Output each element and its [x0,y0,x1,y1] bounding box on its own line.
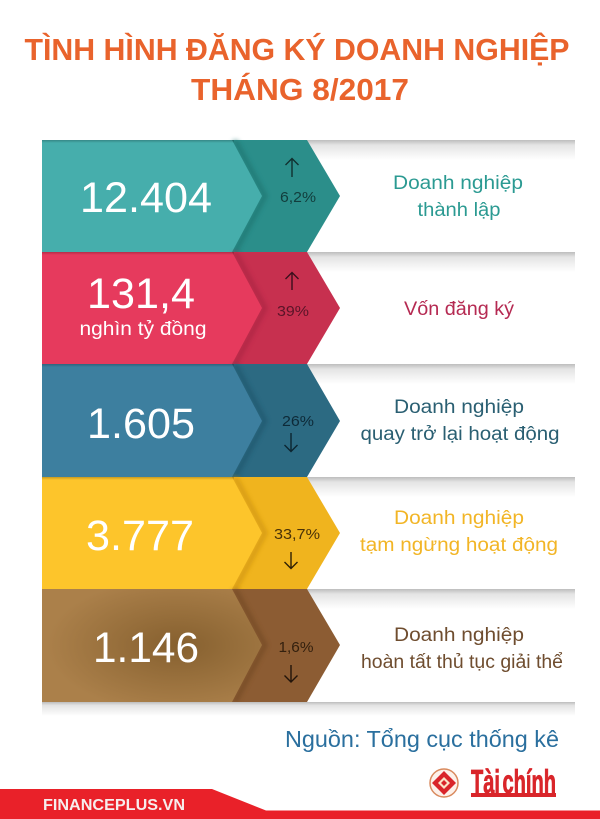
footer text: FINANCEPLUS.VN [43,797,185,814]
value: 3.777: 3.777 [86,512,194,560]
panel: doanh nghiệp hoàn tất thủ tục giải thể: hoàn tất thủ tục giải thể [361,652,563,673]
value: 1.605: 1.605 [87,400,195,448]
value: 131,4 nghìn tỷ đồng [42,252,262,364]
change chevron: 1,6% down: 1,6% [278,639,314,656]
panel: doanh nghiệp quay trở lại hoạt động [42,364,575,477]
icon: arrow down [284,665,298,682]
panel: doanh nghiệp thành lập: thành lập [418,200,500,221]
change chevron: 1,6% down [232,589,340,702]
label: vốn đăng ký: Vốn đăng ký [404,299,515,320]
title [24,31,570,107]
value: 1.146: 1.146 [93,624,199,672]
icon: arrow down [284,433,298,452]
footer bar [0,789,600,819]
label: doanh nghiệp quay trở lại hoạt động: Doanh nghiệp [394,397,524,418]
icon: emblem [430,769,458,797]
change chevron: 33,7% down: 33,7% [274,526,320,543]
source note: Nguồn: Tổng cục thống kê [285,726,559,752]
change chevron: 6,2% up: 6,2% [280,189,316,206]
change chevron: 39% up [232,252,340,364]
bottom shadow [42,702,575,716]
panel: doanh nghiệp tạm ngừng hoạt động: tạm ngừng hoạt động [360,535,558,556]
value: 1.605 [42,364,262,477]
panel: vốn đăng ký [42,252,575,364]
value: 12.404 [42,140,262,252]
change chevron: 6,2% up [232,140,340,252]
panel: doanh nghiệp thành lập [42,140,575,252]
value: 131,4 nghìn tỷ đồng: 131,4 [87,270,195,318]
logo: Tài chính [430,763,556,800]
change chevron: 26% down: 26% [282,413,314,430]
value: 3.777 [42,477,262,589]
title: THÁNG 8/2017 [191,72,409,107]
panel: doanh nghiệp hoàn tất thủ tục giải thể [42,589,575,702]
value: 131,4 nghìn tỷ đồng: nghìn tỷ đồng [80,318,206,340]
label: doanh nghiệp thành lập: Doanh nghiệp [393,173,523,194]
change chevron: 33,7% down [232,477,340,589]
value: 1.146 [42,589,262,702]
label: doanh nghiệp hoàn tất thủ tục giải thể: Doanh nghiệp [394,625,524,646]
change chevron: 26% down [232,364,340,477]
change chevron: 39% up: 39% [277,303,309,320]
value: 12.404: 12.404 [80,174,212,222]
label: doanh nghiệp tạm ngừng hoạt động: Doanh nghiệp [394,508,524,529]
panel: doanh nghiệp quay trở lại hoạt động: quay trở lại hoạt động [360,424,560,445]
icon: arrow down [284,552,298,568]
panel: doanh nghiệp tạm ngừng hoạt động [42,477,575,589]
title: TÌNH HÌNH ĐĂNG KÝ DOANH NGHIỆP [24,31,570,67]
icon: arrow up [286,272,298,290]
icon: arrow up [286,158,298,177]
